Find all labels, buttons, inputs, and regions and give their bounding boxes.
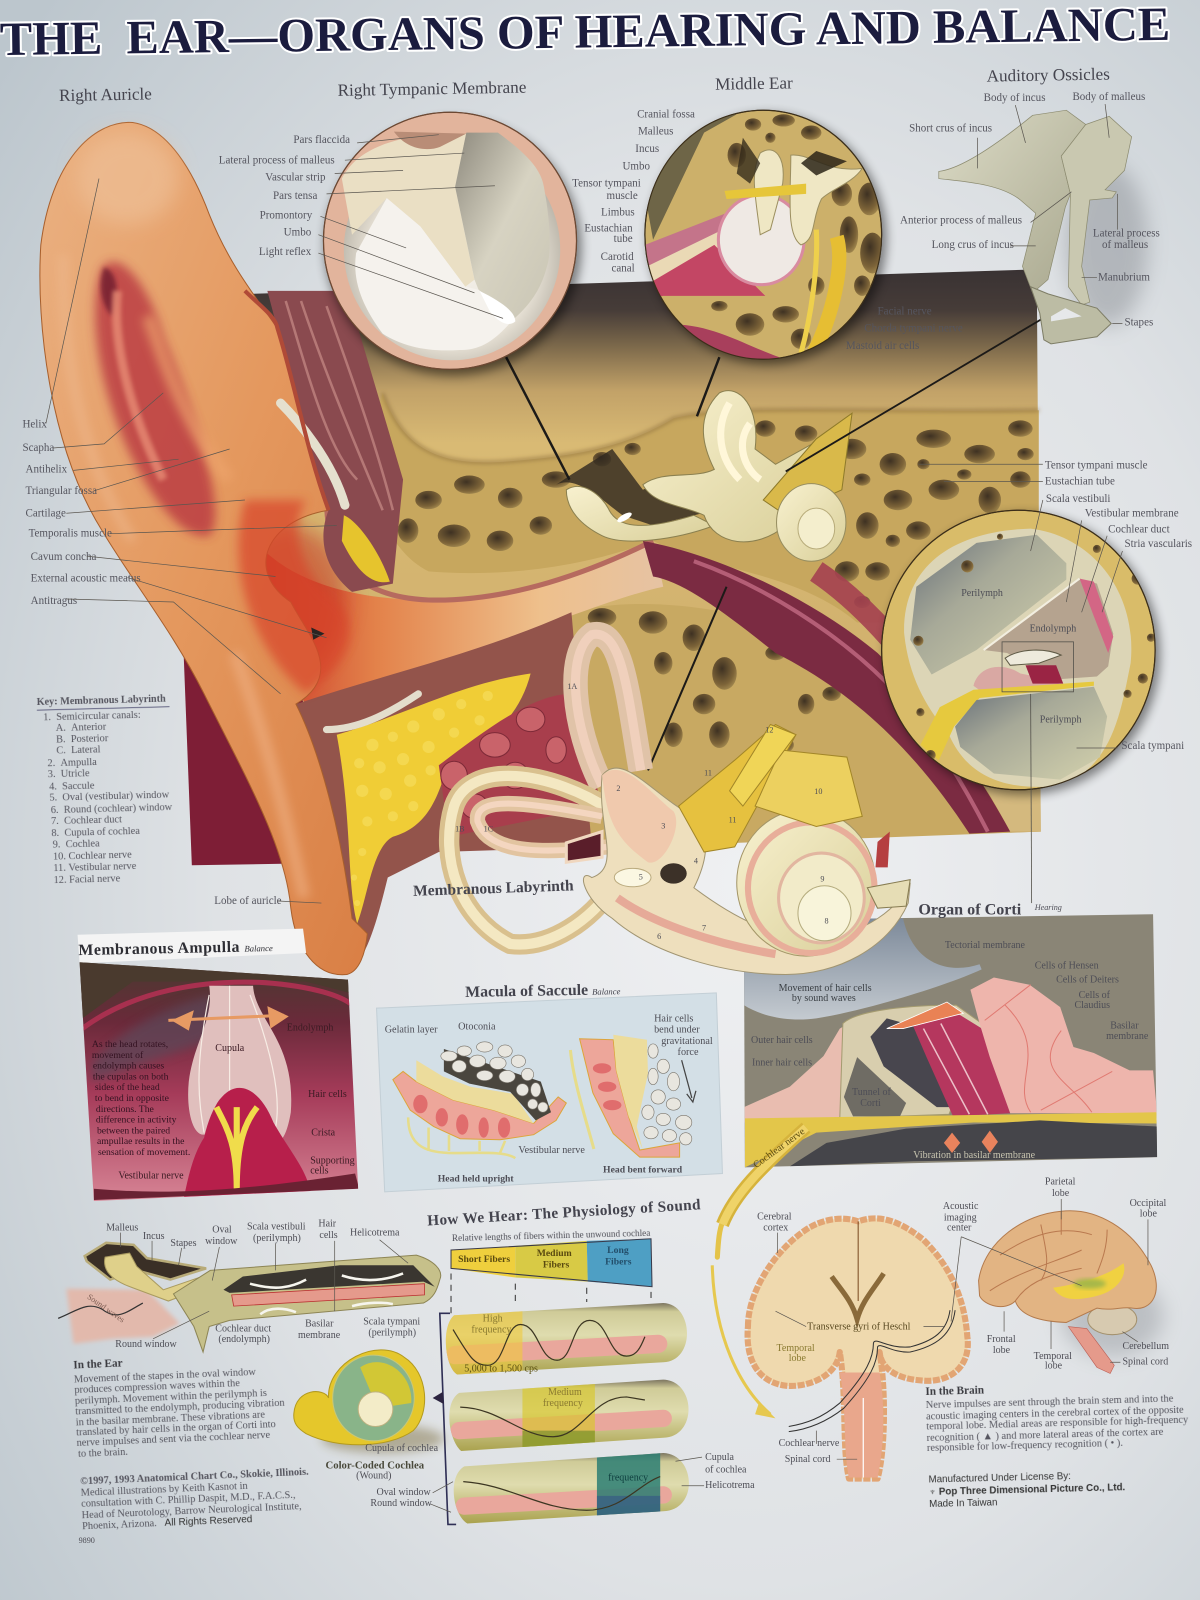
labels: middle ear	[572, 108, 963, 352]
otoconia upright	[444, 1049, 551, 1120]
inset: cochlear cross section	[882, 510, 1160, 903]
panel: membranous ampulla	[78, 929, 359, 1201]
key: membranous labyrinth: B. Posterior	[56, 733, 109, 745]
brain lateral view: lobe	[1045, 1360, 1063, 1371]
diagram: sound through the ear: Oval	[212, 1225, 232, 1236]
diagram: sound through the ear: Round window	[115, 1339, 177, 1350]
labels: ossicles: Short crus of incus	[909, 123, 992, 135]
gel layer upright	[416, 1060, 534, 1123]
panel: membranous ampulla: difference in activity	[96, 1114, 177, 1125]
labels: cochlea section: Scala tympani	[1121, 740, 1184, 752]
labels: auricle: Lobe of auricle	[214, 895, 282, 907]
text: in the brain: temporal lobe. Medial areas are responsible for high-frequency	[926, 1415, 1189, 1433]
diagram: sound through the ear: Helicotrema	[350, 1228, 400, 1239]
manufacturer credit	[928, 1470, 1126, 1510]
middle ear cavity	[85, 1243, 206, 1280]
number labels: 1A	[567, 682, 577, 691]
labels: auricle: Antihelix	[26, 463, 68, 475]
nerve fibres upright	[408, 1117, 515, 1158]
malleus	[1061, 116, 1132, 305]
panel: macula of saccule: Hair cells	[654, 1013, 693, 1024]
brain lateral view: Occipital	[1130, 1198, 1166, 1209]
labels: cochlea section	[918, 459, 1192, 752]
number labels: 7	[702, 924, 706, 933]
unrolled cochlea tube	[173, 1255, 441, 1352]
brain coronal section: cortex	[763, 1223, 788, 1234]
panel: membranous ampulla: to bend in opposite	[95, 1093, 169, 1104]
labels: middle ear: Malleus	[638, 126, 673, 138]
chart: high frequency capsule: High	[483, 1313, 503, 1324]
labels: middle ear: Umbo	[622, 160, 650, 172]
diagram: sound through the ear	[58, 1219, 441, 1352]
panel: dark red backing behind ear lobe	[182, 602, 311, 865]
number labels: 11	[729, 815, 736, 824]
labels: auricle: Antitragus	[31, 595, 77, 607]
text: in the brain: recognition ( ▲ ) and more lateral areas of the cortex are	[927, 1427, 1164, 1444]
panel: membranous ampulla: As the head rotates,	[92, 1039, 168, 1050]
section headings: Right Tympanic Membrane	[337, 78, 527, 100]
color coded cochlea: Color-Coded Cochlea	[326, 1459, 425, 1471]
chart: low frequency capsule: frequency	[608, 1473, 648, 1484]
diagram: sound through the ear: Cochlear duct	[215, 1324, 271, 1335]
number labels: 8	[824, 916, 829, 925]
labels: middle ear: Tensor tympani	[572, 178, 641, 190]
number labels: 11	[704, 769, 712, 778]
heading: organ of corti: Hearing	[1034, 903, 1062, 912]
labels: tympanic membrane: Pars tensa	[273, 190, 317, 202]
diagram: sound through the ear: Scala tympani	[363, 1316, 420, 1327]
brain lateral view: lobe	[1052, 1188, 1070, 1199]
labels: auricle: Cartilage	[26, 507, 66, 519]
text: in the ear: Medical illustrations by Keith Kasnot in	[81, 1481, 249, 1499]
labels: middle ear: muscle	[607, 190, 638, 202]
caption: fibre lengths: Relative lengths of fibers within the unwound cochlea	[452, 1228, 650, 1243]
panel: membranous ampulla: directions. The	[96, 1104, 154, 1115]
section through upper ear: muscle, cartilage, fat	[245, 291, 403, 592]
brain lateral view: imaging	[944, 1212, 977, 1223]
panel: macula of saccule: Vestibular nerve	[518, 1145, 585, 1156]
labels: auricle: Triangular fossa	[26, 485, 97, 497]
labels: tympanic membrane: Promontory	[260, 209, 313, 221]
panel: membranous ampulla: Supporting	[310, 1155, 355, 1166]
chart: high frequency capsule	[446, 1303, 687, 1374]
key: membranous labyrinth: 2. Ampulla	[47, 757, 97, 769]
panel: macula of saccule: Head held upright	[438, 1174, 514, 1185]
panel: organ of corti: Claudius	[1074, 1000, 1110, 1011]
diagram: sound through the ear: (perilymph)	[253, 1233, 301, 1244]
labels: cochlea section: Vestibular membrane	[1085, 507, 1179, 519]
number labels: 4	[694, 856, 698, 865]
hair cells upright	[393, 1071, 566, 1140]
labels: auricle: Temporalis muscle	[29, 528, 112, 540]
text: in the brain: responsible for low-frequency recognition ( • ).	[927, 1438, 1123, 1454]
brain coronal section: Spinal cord	[785, 1454, 831, 1465]
panel: membranous ampulla: Endolymph	[287, 1023, 333, 1034]
nerves	[679, 724, 862, 852]
panel: membranous ampulla: endolymph causes	[93, 1060, 164, 1071]
labels: auricle: Scapha	[22, 442, 54, 454]
key: membranous labyrinth: C. Lateral	[56, 744, 101, 757]
key: membranous labyrinth: 7. Cochlear duct	[51, 814, 122, 827]
labels: middle ear: Chorda tympani nerve	[864, 323, 963, 335]
panel: membranous ampulla: Crista	[311, 1128, 336, 1139]
text: in the ear: translated by hair cells in the organ of Corti into	[76, 1419, 276, 1439]
labels: middle ear: Facial nerve	[878, 305, 932, 317]
manufacturer credit: Manufactured Under License By:	[928, 1471, 1071, 1486]
spongy bone lower	[480, 604, 1041, 849]
heading: organ of corti: Organ of Corti	[918, 901, 1022, 918]
number labels: 6	[657, 932, 661, 941]
ossicles in section	[556, 391, 852, 561]
panel: organ of corti: Cochlear nerve	[751, 1126, 808, 1171]
panel: macula of saccule: gravitational	[661, 1036, 713, 1047]
inset: cochlear cross section: Perilymph	[1040, 714, 1081, 725]
labels: tympanic membrane: Umbo	[284, 227, 312, 239]
key: membranous labyrinth: 11. Vestibular nerve	[53, 861, 137, 874]
leader lines to insets	[506, 318, 1043, 770]
labels around capsules: Oval window	[377, 1487, 431, 1498]
panel: organ of corti: Corti	[860, 1098, 881, 1109]
brain lateral view: center	[947, 1223, 972, 1234]
panel: organ of corti: by sound waves	[792, 993, 856, 1004]
color coded cochlea: Cupula of cochlea	[365, 1443, 439, 1454]
diagram: sound through the ear: Sound waves	[86, 1292, 126, 1324]
labels: middle ear: Incus	[635, 143, 659, 155]
text: in the ear: Head of Neurotology, Barrow Neurological Institute,	[81, 1501, 302, 1521]
labels: cochlea section: Scala vestibuli	[1046, 493, 1110, 505]
section headings	[59, 64, 1110, 105]
heading strip	[78, 929, 306, 963]
ear canal	[235, 500, 663, 704]
lower ear tissue: yellow fat and red vessels	[296, 612, 602, 974]
panel: organ of corti	[717, 914, 1157, 1257]
number labels: 12	[765, 726, 773, 735]
labels around capsules	[370, 1452, 755, 1512]
section headings: Right Auricle	[59, 84, 152, 105]
brain lateral view: Temporal	[1034, 1351, 1072, 1362]
pink canal wedge	[66, 1289, 180, 1344]
bracket with pointer to cochlea	[433, 1313, 456, 1524]
panel: membranous ampulla: Membranous Ampulla Balance	[78, 938, 273, 959]
section headings: Middle Ear	[715, 73, 793, 94]
chart: medium frequency capsule: frequency	[543, 1398, 583, 1409]
labels: tympanic membrane	[219, 134, 503, 318]
main outer ear	[40, 122, 367, 975]
chart: fibre length bar: Short Fibers	[458, 1254, 510, 1265]
panel: temporal bone cross section	[250, 269, 1041, 849]
diagram: sound through the ear: Incus	[143, 1231, 165, 1242]
brain coronal section: Cochlear nerve	[779, 1438, 840, 1449]
diagram: sound through the ear: cells	[319, 1230, 338, 1241]
labels: tympanic membrane: Pars flaccida	[293, 134, 350, 146]
manufacturer credit: ♆ Pop Three Dimensional Picture Co., Ltd.	[929, 1482, 1126, 1498]
key: membranous labyrinth: Key: Membranous Labyrinth	[37, 694, 166, 708]
panel: organ of corti: Tectorial membrane	[945, 940, 1026, 951]
key: membranous labyrinth: 8. Cupula of cochlea	[51, 826, 140, 839]
manufacturer credit: Made In Taiwan	[929, 1497, 998, 1510]
brain coronal section: Cerebral	[757, 1211, 792, 1222]
panel: macula of saccule: force	[678, 1047, 699, 1058]
panel: organ of corti: Vibration in basilar membrane	[913, 1150, 1036, 1161]
text: in the ear: perilymph. Movement within the perilymph is	[75, 1388, 267, 1407]
panel: organ of corti: Cells of Hensen	[1035, 960, 1099, 971]
hair cells bent	[580, 1039, 680, 1157]
labels: cochlea section: Cochlear duct	[1108, 524, 1170, 536]
number labels: 3	[661, 822, 665, 831]
chart: fibre length bar: Fibers	[543, 1259, 569, 1270]
otoconia bent	[642, 1044, 692, 1145]
key: membranous labyrinth: 5. Oval (vestibular) window	[49, 790, 170, 804]
panel: organ of corti: Cells of	[1079, 990, 1111, 1001]
labels: ossicles: Lateral process	[1093, 228, 1160, 240]
chart: medium frequency capsule	[449, 1380, 688, 1451]
panel: membranous ampulla: sides of the head	[95, 1082, 160, 1093]
diagram: sound through the ear: Hair	[318, 1219, 337, 1230]
labels: tympanic membrane: Lateral process of malleus	[219, 154, 335, 166]
labels: auricle: Helix	[22, 419, 47, 431]
key: membranous labyrinth: A. Anterior	[56, 722, 107, 734]
inset: middle ear	[645, 110, 887, 364]
color coded cochlea	[294, 1350, 444, 1482]
number labels: 10	[814, 787, 822, 796]
text: in the ear: produces compression waves within the	[74, 1378, 240, 1396]
labels: middle ear: Carotid	[601, 251, 634, 263]
diagram: sound through the ear: window	[205, 1236, 238, 1247]
text: in the ear	[73, 1350, 311, 1532]
chart: medium frequency capsule: Medium	[548, 1387, 582, 1398]
text: in the ear: consultation with C. Phillip Daspit, M.D., F.A.C.S.,	[81, 1490, 296, 1510]
labels: tympanic membrane: Light reflex	[259, 246, 312, 258]
text: in the ear: Phoenix, Arizona. All Rights Reserved	[82, 1514, 253, 1532]
text: in the ear: to the brain.	[78, 1447, 128, 1460]
panel: membranous ampulla: between the paired	[97, 1126, 170, 1137]
labels: middle ear: Eustachian	[584, 223, 633, 235]
number labels	[455, 682, 829, 941]
labels around capsules: Cupula	[705, 1452, 735, 1463]
panel: membranous ampulla: movement of	[92, 1050, 144, 1061]
labels: auricle: Cavum concha	[31, 551, 96, 563]
text: in the ear: transmitted to the endolymph, producing vibration	[75, 1397, 286, 1417]
number labels: 2	[616, 784, 620, 793]
inset: right tympanic membrane	[323, 112, 582, 376]
brain coronal section: Temporal	[777, 1343, 815, 1354]
panel: macula of saccule: Macula of Saccule Balance	[465, 981, 621, 1001]
panel: organ of corti: Movement of hair cells	[779, 983, 872, 994]
panel: macula of saccule: Gelatin layer	[385, 1025, 438, 1036]
diagram: sound through the ear: (endolymph)	[218, 1334, 270, 1345]
key: membranous labyrinth: 10. Cochlear nerve	[53, 850, 132, 863]
labels: middle ear: Mastoid air cells	[846, 340, 919, 352]
labels: ossicles: Stapes	[1124, 317, 1153, 329]
section headings: Auditory Ossicles	[986, 64, 1110, 86]
labels: middle ear: Cranial fossa	[637, 108, 695, 120]
brain lateral view: Spinal cord	[1122, 1356, 1168, 1367]
labels: cochlea section: Stria vascularis	[1124, 538, 1192, 550]
key: membranous labyrinth: 6. Round (cochlear) window	[51, 802, 173, 816]
inset: cochlear cross section: Endolymph	[1030, 624, 1076, 635]
gel layer bent	[613, 1035, 648, 1150]
panel: macula of saccule: bend under	[654, 1025, 700, 1036]
labels: cochlea section: Tensor tympani muscle	[1045, 459, 1148, 471]
number labels: 1B	[455, 825, 465, 834]
number labels: 1C	[484, 825, 493, 834]
labels: auricle: External acoustic meatus	[31, 573, 141, 585]
panel: organ of corti: Cells of Deiters	[1056, 975, 1119, 986]
color coded cochlea: (Wound)	[356, 1471, 391, 1482]
panel: macula of saccule: Head bent forward	[603, 1164, 683, 1175]
brain coronal section	[748, 1211, 968, 1479]
key: membranous labyrinth: 1. Semicircular canals:	[43, 710, 141, 723]
labels: tympanic membrane: Vascular strip	[265, 172, 326, 184]
curved yellow arrow to brain	[712, 1265, 776, 1418]
eustachian tube	[643, 541, 1010, 834]
text: in the brain	[925, 1379, 1190, 1454]
labels: ossicles: Long crus of incus	[932, 239, 1014, 251]
labels: ossicles: Body of incus	[984, 92, 1045, 104]
labels: ossicles: of malleus	[1102, 239, 1148, 251]
heading: how we hear: How We Hear: The Physiology of Sound	[427, 1196, 701, 1230]
panel: organ of corti: Basilar	[1110, 1021, 1139, 1032]
key: membranous labyrinth: 12. Facial nerve	[53, 874, 121, 886]
panel: membranous ampulla: the cupulas on both	[93, 1072, 169, 1083]
labels: ossicles	[900, 91, 1160, 329]
cochlea	[737, 809, 876, 956]
arrow in ear canal	[311, 628, 324, 640]
panel: membranous ampulla: Vestibular nerve	[118, 1171, 184, 1182]
panel: membranous ampulla: Hair cells	[308, 1089, 347, 1100]
text: in the brain: In the Brain	[925, 1384, 985, 1398]
key: membranous labyrinth: 3. Utricle	[48, 768, 90, 780]
chart: high frequency capsule: 5,000 to 1,500 cps	[464, 1363, 538, 1374]
text: in the ear: in the basilar membrane. These vibrations are	[76, 1410, 266, 1428]
number labels: 5	[639, 873, 643, 882]
panel: organ of corti: Inner hair cells	[752, 1057, 812, 1068]
text: in the brain: Nerve impulses are sent through the brain stem and into the	[926, 1394, 1174, 1411]
panel: macula of saccule	[377, 981, 722, 1192]
labels: ossicles: Anterior process of malleus	[900, 214, 1022, 226]
diagram: sound through the ear: membrane	[298, 1330, 341, 1341]
brain lateral view: lobe	[1140, 1208, 1158, 1219]
heading: membranous labyrinth: Membranous Labyrinth	[413, 877, 574, 900]
labels around capsules: Round window	[370, 1498, 433, 1509]
diagram: sound through the ear: Stapes	[170, 1238, 197, 1249]
labels: middle ear: canal	[611, 262, 635, 274]
labels around capsules: Helicotrema	[705, 1480, 755, 1491]
chart: fibre length bar: Medium	[537, 1248, 572, 1259]
brain lateral view: lobe	[993, 1345, 1011, 1356]
catalogue number: 9890	[79, 1536, 95, 1545]
inset: cochlear cross section: Perilymph	[961, 588, 1003, 599]
chart: fibre length bar	[451, 1239, 652, 1314]
brain lateral view	[943, 1177, 1169, 1373]
brain lateral view: Cerebellum	[1122, 1341, 1169, 1352]
key: membranous labyrinth: 4. Saccule	[49, 780, 95, 792]
auditory ossicles	[939, 110, 1148, 344]
stapes	[1031, 287, 1111, 344]
spongy bone upper	[373, 393, 1039, 622]
text: in the ear: In the Ear	[73, 1357, 123, 1371]
text: in the brain: acoustic imaging centers in the cerebral cortex of the opposite	[926, 1405, 1184, 1422]
labels: ossicles: Body of malleus	[1072, 91, 1145, 103]
number labels: 9	[820, 875, 824, 884]
nerve fibres bent	[570, 1050, 594, 1149]
labels around capsules: of cochlea	[705, 1464, 747, 1475]
brain lateral view: Parietal	[1045, 1177, 1076, 1188]
brain coronal section: Transverse gyri of Heschl	[807, 1322, 911, 1333]
chart: fibre length bar: Fibers	[605, 1256, 632, 1267]
brain lateral view: Frontal	[987, 1334, 1016, 1345]
panel: organ of corti: Outer hair cells	[751, 1035, 813, 1046]
incus	[939, 110, 1086, 293]
panel: organ of corti: membrane	[1106, 1031, 1149, 1042]
panel: membranous ampulla: sensation of movement.	[98, 1147, 190, 1158]
panel: macula of saccule: Otoconia	[458, 1022, 496, 1033]
panel: organ of corti: Tunnel of	[852, 1087, 892, 1098]
key: membranous labyrinth: 9. Cochlea	[53, 838, 100, 851]
panel: membranous ampulla: ampullae results in the	[97, 1136, 184, 1147]
text: in the ear: Movement of the stapes in the oval window	[74, 1367, 257, 1386]
labels: auricle	[22, 179, 337, 907]
panel: membranous ampulla: cells	[310, 1165, 329, 1176]
text: in the ear: ©1997, 1993 Anatomical Chart Co., Skokie, Illinois.	[80, 1467, 309, 1488]
labels: middle ear: Limbus	[601, 206, 635, 218]
labels: ossicles: Manubrium	[1098, 272, 1150, 284]
chart: fibre length bar: Long	[607, 1245, 629, 1256]
labels: cochlea section: Eustachian tube	[1045, 476, 1115, 488]
panel: membranous ampulla: Cupula	[215, 1043, 245, 1054]
bone holes	[398, 420, 1034, 752]
diagram: sound through the ear: Scala vestibuli	[247, 1222, 306, 1233]
diagram: sound through the ear: (perilymph)	[368, 1328, 416, 1339]
diagram: sound through the ear: Malleus	[106, 1223, 138, 1234]
key: membranous labyrinth	[37, 694, 175, 887]
diagram: sound through the ear: Basilar	[305, 1319, 334, 1330]
text: in the ear: nerve impulses and sent via the cochlear nerve	[76, 1430, 271, 1449]
chart: low frequency capsule	[454, 1449, 689, 1523]
membranous labyrinth	[449, 634, 910, 974]
labels: middle ear: tube	[614, 233, 633, 245]
chart: high frequency capsule: frequency	[471, 1325, 511, 1336]
brain lateral view: Acoustic	[943, 1201, 979, 1212]
brain coronal section: lobe	[789, 1353, 807, 1364]
